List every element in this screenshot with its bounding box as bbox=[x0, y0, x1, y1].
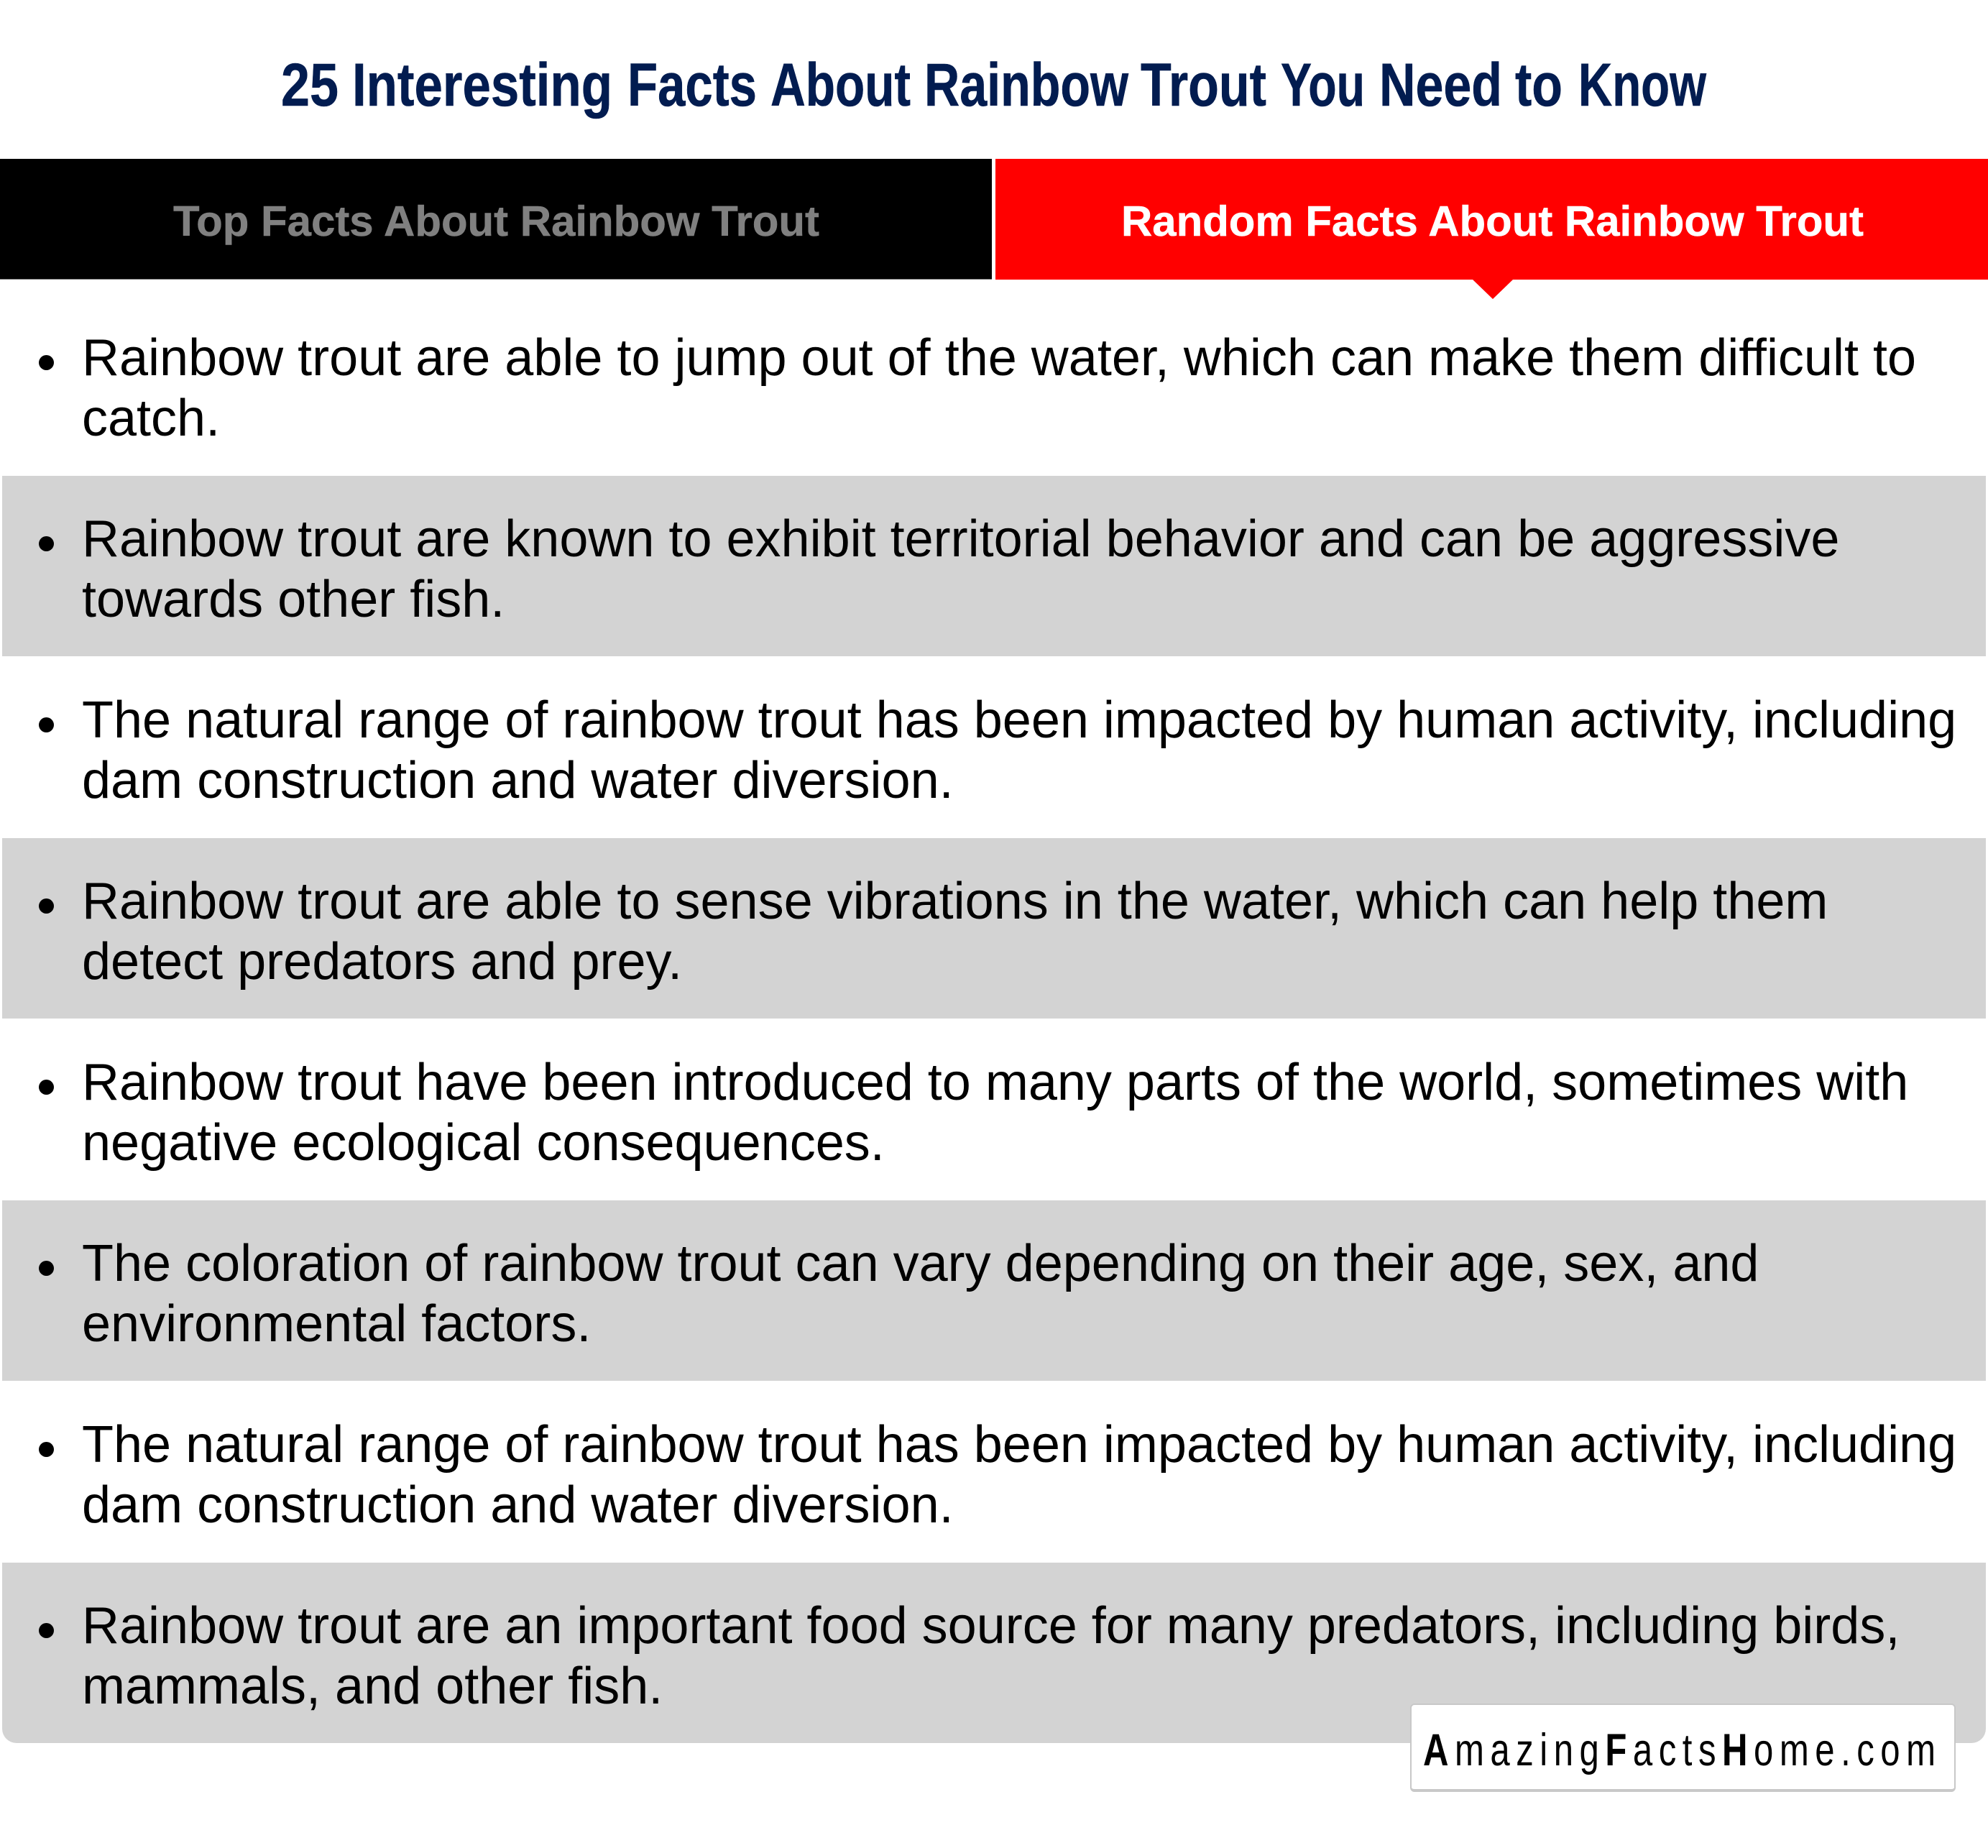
fact 6 bbox=[2, 1200, 1986, 1381]
fact 1: Rainbow trout are able to jump out of the water, which can make them difficult to bbox=[82, 329, 1916, 387]
fact 8: mammals, and other fish. bbox=[82, 1658, 663, 1715]
tab: top facts bbox=[0, 159, 992, 280]
fact 5 bbox=[39, 1054, 1908, 1172]
fact 7: The natural range of rainbow trout has been impacted by human activity, including bbox=[82, 1416, 1956, 1474]
fact 2: towards other fish. bbox=[82, 571, 505, 628]
fact 8: Rainbow trout are an important food source for many predators, including birds, bbox=[82, 1597, 1900, 1655]
title: Know bbox=[1578, 51, 1707, 119]
title: Need bbox=[1379, 51, 1502, 119]
fact 5: negative ecological consequences. bbox=[82, 1114, 885, 1172]
watermark: AmazingFactsHome.com bbox=[1423, 1724, 1942, 1775]
title: Trout bbox=[1141, 51, 1266, 119]
fact 2 bbox=[2, 476, 1986, 656]
title: Facts bbox=[627, 51, 757, 119]
fact 6: environmental factors. bbox=[82, 1295, 591, 1353]
fact 8 bbox=[2, 1563, 1986, 1743]
tab: top facts: Top Facts About Rainbow Trout bbox=[173, 198, 819, 245]
title: Interesting bbox=[352, 51, 612, 119]
fact 7: dam construction and water diversion. bbox=[82, 1476, 954, 1534]
title: You bbox=[1281, 51, 1365, 119]
fact 4 bbox=[2, 838, 1986, 1019]
fact 3: dam construction and water diversion. bbox=[82, 752, 954, 809]
fact 2: Rainbow trout are known to exhibit territorial behavior and can be aggressive bbox=[82, 510, 1839, 568]
title: About bbox=[770, 51, 911, 119]
fact 3: The natural range of rainbow trout has been impacted by human activity, including bbox=[82, 691, 1956, 749]
title: Rainbow bbox=[924, 51, 1129, 119]
fact 7 bbox=[39, 1416, 1956, 1534]
title: to bbox=[1515, 51, 1563, 119]
fact 1: catch. bbox=[82, 390, 220, 447]
tab: random facts bbox=[995, 159, 1988, 280]
watermark bbox=[1410, 1704, 1956, 1792]
title: 25 bbox=[281, 51, 339, 119]
fact 1 bbox=[39, 329, 1916, 447]
fact 4: Rainbow trout are able to sense vibrations in the water, which can help them bbox=[82, 873, 1828, 930]
fact 3 bbox=[39, 691, 1956, 809]
fact 4: detect predators and prey. bbox=[82, 933, 682, 990]
tab: random facts: Random Facts About Rainbow Trout bbox=[1121, 198, 1864, 245]
fact 6: The coloration of rainbow trout can vary depending on their age, sex, and bbox=[82, 1235, 1759, 1292]
fact 5: Rainbow trout have been introduced to many parts of the world, sometimes with bbox=[82, 1054, 1908, 1111]
title bbox=[281, 51, 1707, 119]
